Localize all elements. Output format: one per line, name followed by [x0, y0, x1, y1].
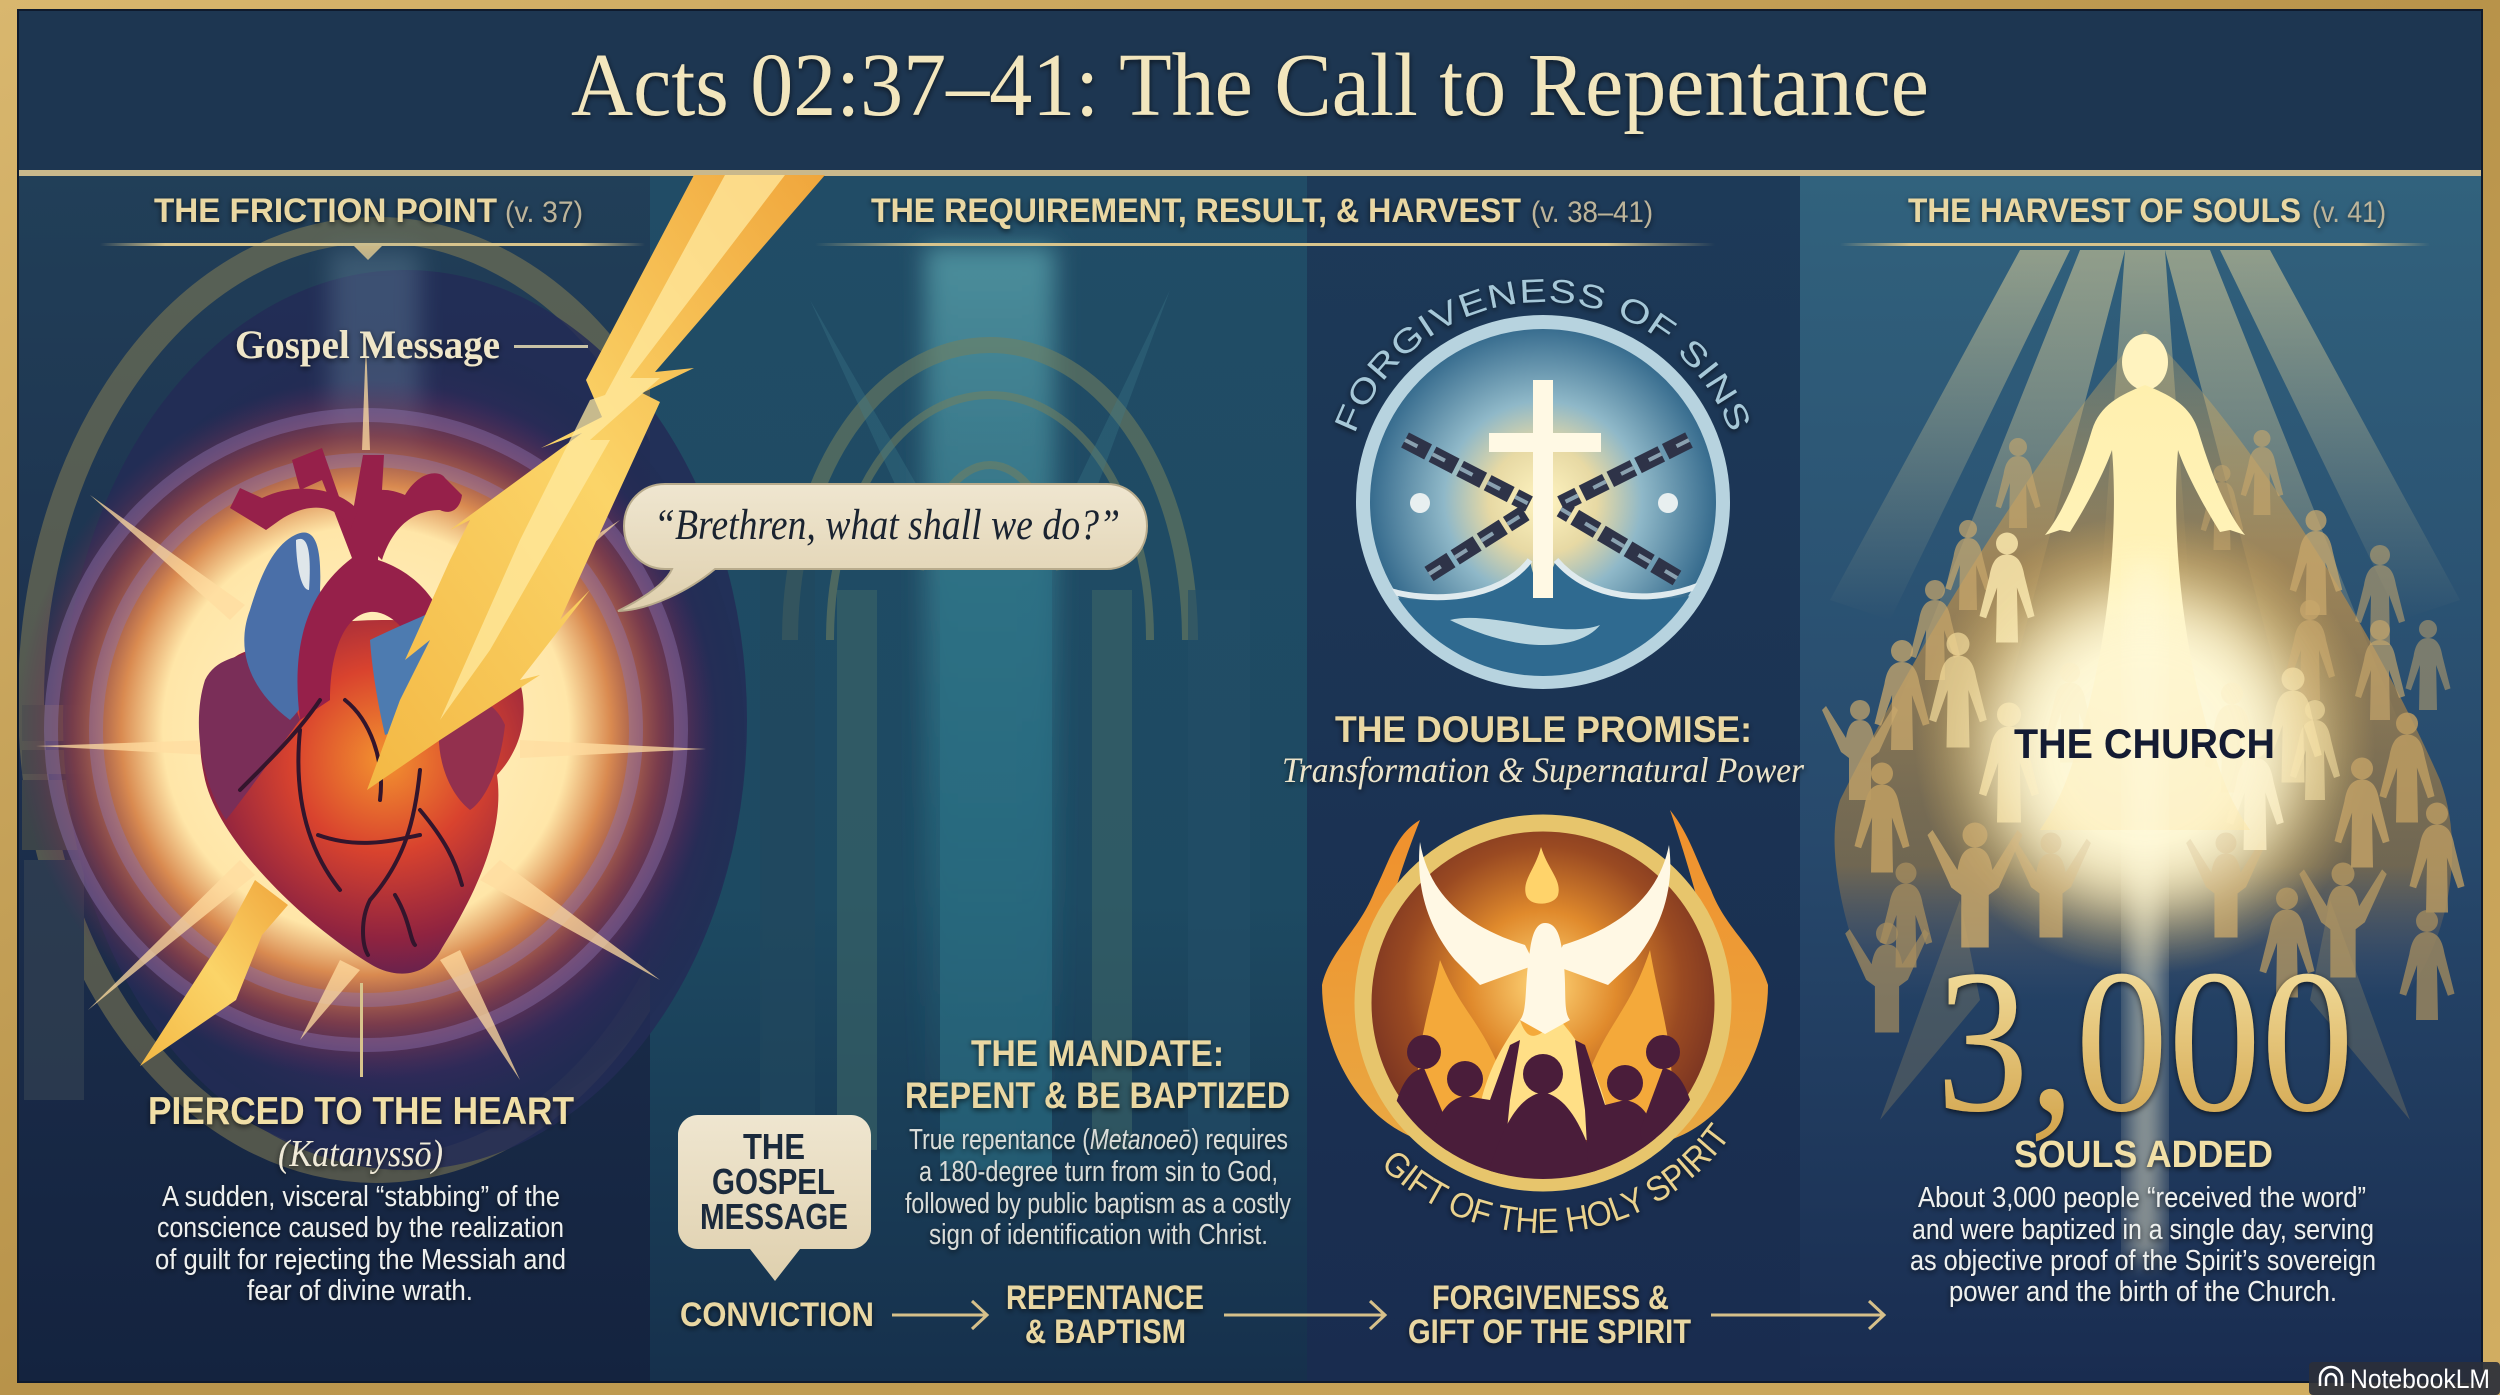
text block: the mandate: REPENT & BE BAPTIZED	[905, 1075, 1290, 1116]
aorta and branches	[292, 448, 450, 720]
text block: souls added	[1910, 1134, 2376, 1308]
text block: souls added: as objective proof of the Spirit’s sovereign	[1910, 1245, 2376, 1277]
burst rays	[36, 340, 706, 1080]
cross	[1533, 380, 1553, 598]
section heading: friction point: (v. 37)	[505, 196, 583, 229]
left atrium bump	[199, 640, 300, 820]
step: repentance and baptism	[1006, 1279, 1204, 1351]
callout: the gospel message: THE	[743, 1126, 805, 1167]
text block: pierced to the heart: PIERCED TO THE HEART	[148, 1090, 574, 1133]
section heading: harvest: (v. 41)	[2312, 196, 2386, 229]
text block: souls added: About 3,000 people “received the word”	[1918, 1182, 2366, 1214]
inner flames	[1417, 950, 1672, 1120]
dove	[1419, 842, 1670, 1034]
light rays	[1830, 250, 2460, 800]
blue vein	[244, 532, 324, 720]
section heading: requirement: THE REQUIREMENT, RESULT, & HARVEST	[871, 192, 1521, 230]
step: conviction: CONVICTION	[680, 1296, 874, 1334]
panel: harvest background	[1800, 176, 2482, 1382]
panel: friction point background	[18, 176, 721, 1382]
coronary veins	[240, 700, 462, 955]
process flow: conviction to church	[680, 1279, 1884, 1351]
section heading: harvest: THE HARVEST OF SOULS	[1908, 192, 2301, 230]
right atrium bump	[439, 698, 505, 810]
text block: souls added: and were baptized in a single day, serving	[1912, 1214, 2374, 1246]
purple arcs	[51, 415, 681, 1045]
label: gift of the holy spirit: GIFT OF THE HOLY SPIRIT	[1384, 1122, 1726, 1238]
rays	[810, 290, 1170, 560]
label: gospel message: Gospel Message	[235, 322, 500, 367]
crowd figures	[1822, 430, 2464, 1032]
text block: souls added: SOULS ADDED	[2014, 1134, 2273, 1176]
panel: promises background	[1307, 176, 1802, 1382]
columns	[760, 570, 1250, 1170]
callout: the gospel message: GOSPEL	[712, 1161, 835, 1202]
text block: the mandate: followed by public baptism as a costly	[905, 1188, 1291, 1220]
step: repentance and baptism: & BAPTISM	[1025, 1313, 1186, 1351]
text block: pierced to the heart: conscience caused by the realization	[157, 1212, 564, 1244]
text block: pierced to the heart: A sudden, visceral “stabbing” of the	[162, 1181, 560, 1213]
upper bolt	[367, 175, 825, 790]
arrow 2	[1224, 1301, 1385, 1329]
outer flames	[1322, 810, 1768, 1140]
raised-hands silhouettes	[1396, 1035, 1690, 1179]
text block: pierced to the heart	[148, 1090, 574, 1307]
lower bolt	[140, 880, 288, 1066]
icon: forgiveness of sins medallion	[1360, 322, 1730, 700]
watermark: NotebookLM: NotebookLM	[2350, 1364, 2490, 1394]
pointer line	[360, 983, 363, 1077]
text block: the double promise	[1282, 709, 1805, 790]
header band	[18, 10, 2482, 176]
nested arches	[790, 345, 1190, 640]
text block: the mandate: a 180-degree turn from sin to God,	[919, 1156, 1278, 1188]
callout: the gospel message: MESSAGE	[700, 1196, 848, 1237]
speech bubble: “Brethren, what shall we do?”	[654, 502, 1120, 549]
dark disk and rays	[63, 270, 747, 1170]
stat: 3,000: 3,000	[1936, 928, 2354, 1155]
step: forgiveness and gift: FORGIVENESS &	[1432, 1279, 1669, 1317]
arrow 3	[1711, 1301, 1884, 1329]
text block: the mandate: THE MANDATE:	[971, 1033, 1224, 1074]
text block: souls added: power and the birth of the Church.	[1949, 1276, 2337, 1308]
water	[1398, 560, 1690, 676]
section heading: requirement: (v. 38–41)	[1531, 196, 1653, 229]
text block: pierced to the heart: of guilt for rejecting the Messiah and	[155, 1244, 566, 1276]
light beam	[925, 246, 1055, 1146]
icon: holy spirit medallion	[1322, 810, 1768, 1200]
section heading: friction point: THE FRICTION POINT	[154, 192, 497, 230]
central figure	[2040, 334, 2250, 1260]
illustration: pierced heart	[16, 175, 825, 1170]
chains	[1405, 440, 1689, 578]
title: Acts 02:37–41: The Call to Repentance	[571, 36, 1929, 135]
step: repentance and baptism: REPENTANCE	[1006, 1279, 1204, 1317]
crowd mass	[1835, 330, 2452, 1000]
step: forgiveness and gift	[1408, 1279, 1691, 1351]
pulmonary artery	[370, 596, 464, 735]
text block: pierced to the heart: (Katanyssō)	[278, 1133, 443, 1175]
small flame	[1525, 847, 1559, 904]
text block: pierced to the heart: fear of divine wrath.	[247, 1275, 473, 1307]
heart body	[200, 620, 524, 974]
text block: the double promise: Transformation & Supernatural Power	[1282, 750, 1805, 790]
text block: the mandate: True repentance (Metanoeō) requires	[909, 1124, 1288, 1156]
label: the church: THE CHURCH	[2014, 720, 2275, 767]
illustration: the church crowd	[1822, 250, 2464, 1260]
text block: the double promise: THE DOUBLE PROMISE:	[1335, 709, 1752, 750]
label: forgiveness of sins: FORGIVENESS OF SINS	[1334, 278, 1751, 434]
step: forgiveness and gift: GIFT OF THE SPIRIT	[1408, 1313, 1691, 1351]
text block: the mandate: sign of identification with Christ.	[929, 1219, 1268, 1251]
text block: the mandate	[905, 1033, 1291, 1251]
arch architecture left	[22, 230, 721, 1170]
arrow 1	[892, 1301, 987, 1329]
speech bubble	[618, 484, 1147, 611]
callout: the gospel message	[678, 1115, 871, 1281]
panel: requirement mandate background	[650, 176, 1310, 1382]
